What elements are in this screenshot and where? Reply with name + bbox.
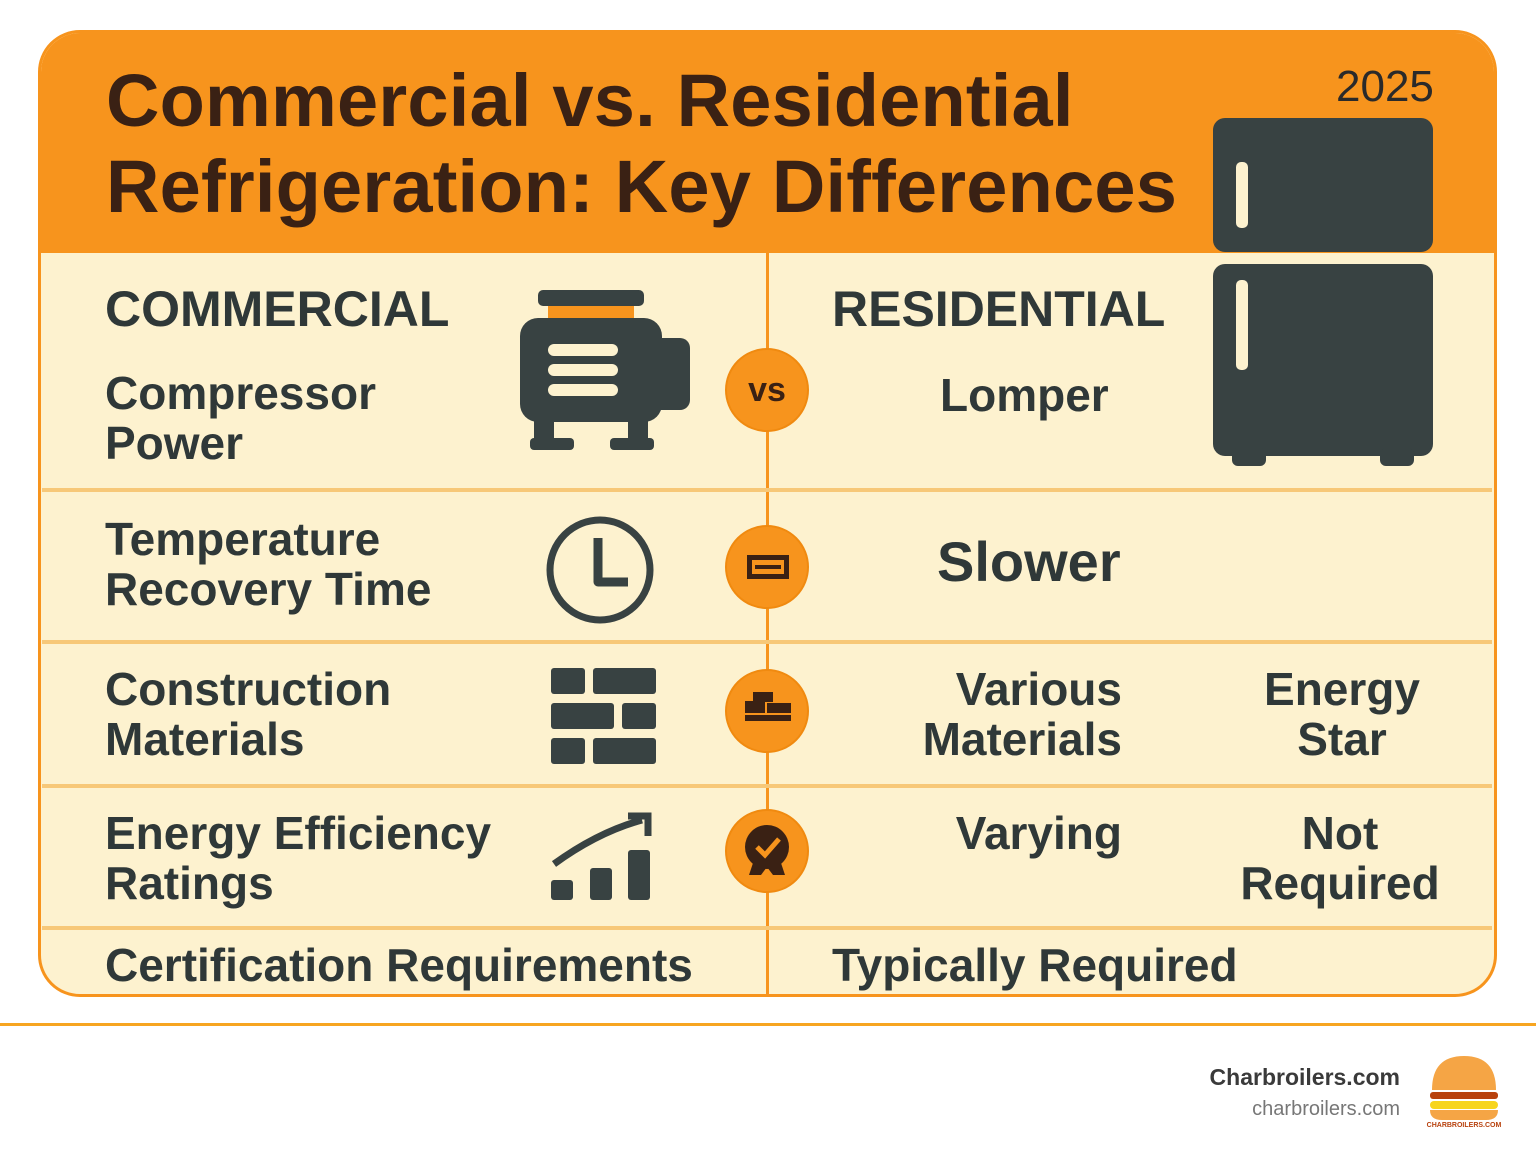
icon: compressor (520, 290, 690, 450)
vs circle: vs (748, 371, 786, 409)
icon circle: blocks (725, 669, 809, 753)
title (106, 59, 1177, 228)
icon: fridge (1213, 118, 1433, 466)
title: Refrigeration: Key Differences (106, 145, 1177, 228)
icon: clock (546, 516, 654, 624)
text: Lomper (940, 369, 1109, 421)
row 3: Materials (105, 713, 304, 765)
row 3: Construction (105, 663, 391, 715)
text: Typically Required (832, 939, 1238, 991)
icon circle: badge (725, 809, 809, 893)
icon: chart (551, 812, 652, 900)
row 5: Certification Requirements (105, 939, 693, 991)
vs circle (725, 348, 809, 432)
row 2 (105, 513, 431, 615)
row 4: Ratings (105, 857, 274, 909)
logo burger (1426, 1056, 1501, 1129)
center vertical line (766, 250, 769, 995)
row 2: Recovery Time (105, 563, 431, 615)
text: Varying (956, 807, 1122, 859)
year: 2025 (1336, 62, 1434, 111)
row 3 (105, 663, 391, 765)
text: Required (1240, 857, 1440, 909)
text: RESIDENTIAL (832, 281, 1165, 337)
text: Star (1297, 713, 1387, 765)
text: Materials (923, 713, 1122, 765)
text: Compressor (105, 367, 376, 419)
text: Not (1302, 807, 1378, 859)
row 4 (105, 807, 491, 909)
icon circle: display (725, 525, 809, 609)
row 1 text: COMMERCIAL (105, 281, 449, 337)
card (38, 30, 1497, 997)
footer line (0, 1023, 1536, 1026)
text: Power (105, 417, 243, 469)
text: Various (956, 663, 1122, 715)
text: charbroilers.com (1252, 1098, 1400, 1120)
logo burger: CHARBROILERS.COM (1427, 1122, 1501, 1129)
row 4: Energy Efficiency (105, 807, 491, 859)
title: Commercial vs. Residential (106, 59, 1074, 142)
text: Energy (1264, 663, 1420, 715)
row 2: Temperature (105, 513, 380, 565)
footer brand: Charbroilers.com (1210, 1064, 1400, 1090)
header band (41, 33, 1494, 253)
icon: bricks (551, 668, 656, 764)
text: Slower (937, 530, 1121, 593)
